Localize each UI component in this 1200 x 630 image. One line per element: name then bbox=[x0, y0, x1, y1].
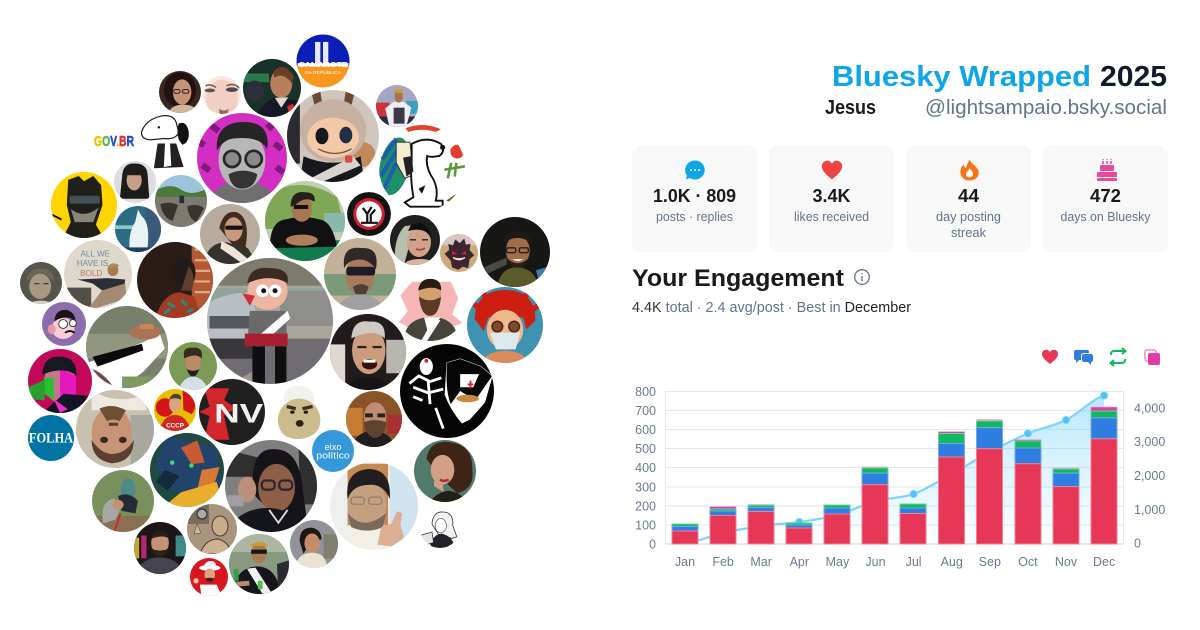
bar: Oct bbox=[1015, 440, 1041, 544]
avatar: NV logo bbox=[199, 379, 265, 445]
avatar: bald bearded man bbox=[346, 391, 402, 447]
left axis labels: 800 bbox=[635, 385, 656, 399]
avatar: woman with black hair bbox=[114, 161, 156, 203]
legend icon: heart bbox=[1042, 350, 1058, 364]
month labels: Jun bbox=[865, 555, 886, 569]
left axis labels: 600 bbox=[635, 423, 656, 437]
avatar: small Snoopy sketch bbox=[141, 116, 189, 168]
cumulative area and line bbox=[685, 392, 1108, 544]
avatar: small man in tee bbox=[376, 85, 418, 127]
avatar: old TV man bbox=[20, 262, 62, 304]
avatar: Camarote logo bbox=[296, 34, 350, 88]
avatar: capybara bbox=[86, 306, 168, 388]
legend icon: quotes bbox=[1145, 350, 1160, 365]
left axis labels bbox=[635, 385, 656, 552]
heading: Your Engagement: Your Engagement bbox=[632, 265, 844, 292]
month labels: Feb bbox=[712, 555, 734, 569]
avatar: man with beer in green setting bbox=[243, 59, 301, 117]
avatar: eixo político logo: político bbox=[316, 451, 350, 461]
avatar: Camarote logo: CAMAROTE bbox=[299, 62, 348, 69]
month labels: Sep bbox=[979, 555, 1001, 569]
avatar: man with floral shirt in profile bbox=[137, 242, 213, 318]
avatar: red ring seal badge bbox=[347, 192, 391, 236]
avatar: eixo político logo: eixo bbox=[325, 442, 341, 452]
avatar: Camarote logo: DA REPÚBLICA bbox=[305, 69, 342, 76]
avatar: smiling man with thumbs-up bbox=[330, 462, 418, 550]
avatar: upside-down man bbox=[76, 390, 154, 468]
title: Bluesky Wrapped bbox=[832, 61, 1091, 93]
stat card: posts bbox=[632, 145, 757, 252]
avatar: magenta background man in glasses bbox=[197, 113, 287, 203]
avatar: man black tee at table bbox=[265, 181, 345, 261]
avatar: woman sunglasses with sash bbox=[200, 204, 260, 264]
left axis labels: 400 bbox=[635, 461, 656, 475]
left axis labels: 500 bbox=[635, 442, 656, 456]
avatar: curly-haired woman bbox=[414, 440, 476, 502]
bar: Nov bbox=[1053, 468, 1079, 544]
avatar: neon magenta and green portrait bbox=[28, 349, 92, 413]
avatar: gov.br wordmark: GOV.BR bbox=[94, 133, 134, 150]
stacked bars bbox=[672, 407, 1117, 544]
avatar: NV logo: NV bbox=[214, 399, 264, 429]
stat card: streak: streak bbox=[951, 226, 987, 240]
month labels: Dec bbox=[1093, 555, 1115, 569]
right axis labels: 2,000 bbox=[1134, 469, 1165, 483]
avatar: blue monster art bbox=[150, 433, 224, 507]
avatar: yellow background soldier bbox=[51, 172, 117, 238]
avatar: man with hat and brick wall: BOLD bbox=[80, 269, 102, 278]
month labels bbox=[675, 555, 1115, 569]
avatar: skeleton and Vasco shield bbox=[400, 344, 494, 438]
right axis labels: 1,000 bbox=[1134, 503, 1165, 517]
avatar: woman with glasses and hand bbox=[225, 440, 317, 532]
stat card: streak: 44 bbox=[958, 186, 979, 206]
stat card: likes bbox=[769, 145, 894, 252]
avatar: man shouting, white hair bbox=[330, 314, 406, 390]
avatar: Folha logo: FOLHA bbox=[29, 431, 73, 447]
avatar: close-up eyes bbox=[203, 76, 241, 118]
legend icon: replies bbox=[1074, 350, 1093, 365]
avatar: central mascot photo bbox=[207, 258, 333, 384]
icon: cake bbox=[1097, 159, 1117, 181]
bar: Sep bbox=[976, 419, 1002, 544]
avatar: pigeon with person bbox=[92, 470, 154, 532]
left axis labels: 200 bbox=[635, 500, 656, 514]
right axis labels: 3,000 bbox=[1134, 435, 1165, 449]
engagement summary: 4.4K total · 2.4 avg/post · Best in December bbox=[632, 300, 911, 316]
avatar: CCCP player bbox=[154, 389, 196, 431]
avatar: cartoon bearded man bbox=[399, 278, 462, 341]
avatar: smiling man with curly hair bbox=[480, 217, 550, 287]
avatar: comic panel bbox=[187, 504, 237, 554]
avatar: dog with towel bbox=[278, 386, 320, 439]
avatar cloud bbox=[20, 34, 550, 596]
avatar: man in dark tee with books bbox=[134, 522, 186, 574]
bar: Aug bbox=[938, 432, 964, 544]
stat card: days on Bluesky: days on Bluesky bbox=[1060, 210, 1151, 224]
engagement chart bbox=[635, 385, 1165, 569]
icon: heart bbox=[822, 161, 842, 180]
right axis labels bbox=[1134, 402, 1165, 550]
stat card: likes: likes received bbox=[794, 210, 869, 224]
avatar: line-art woman drawing bbox=[420, 508, 460, 548]
month labels: Apr bbox=[790, 555, 809, 569]
avatar: Gengar bbox=[440, 234, 478, 272]
bar: Dec bbox=[1091, 407, 1117, 544]
avatar: man in green nature bbox=[169, 342, 217, 390]
legend icon: reposts bbox=[1110, 348, 1126, 366]
bar: May bbox=[824, 505, 850, 544]
month labels: Mar bbox=[750, 555, 772, 569]
month labels: May bbox=[826, 555, 850, 569]
stat card: streak bbox=[906, 145, 1031, 252]
right axis labels: 0 bbox=[1134, 536, 1141, 550]
avatar: rocks landscape bbox=[155, 175, 207, 227]
avatar: eixo político logo bbox=[312, 430, 354, 472]
stat card: days on Bluesky: 472 bbox=[1090, 186, 1121, 206]
chart legend bbox=[1042, 348, 1160, 366]
avatar: woman in scarf bbox=[290, 520, 338, 568]
left axis labels: 0 bbox=[649, 538, 656, 552]
avatar: woman with dark hair bbox=[159, 71, 201, 113]
bar: Apr bbox=[786, 523, 812, 544]
bar: Jan bbox=[672, 524, 698, 544]
avatar: purple cartoon with glasses bbox=[42, 302, 86, 346]
bar: Jun bbox=[862, 466, 888, 544]
month labels: Nov bbox=[1055, 555, 1078, 569]
left axis labels: 100 bbox=[635, 518, 656, 532]
avatar: plush toy bbox=[287, 90, 379, 182]
bar: Feb bbox=[710, 507, 736, 544]
avatar: man in Vasco jersey bbox=[229, 534, 289, 594]
avatar: large Snoopy with nightcap bbox=[379, 125, 465, 208]
avatar: man with sunglasses bbox=[324, 238, 396, 310]
bar: Mar bbox=[748, 504, 774, 544]
avatar: red hat illustration bbox=[190, 558, 228, 596]
month labels: Jul bbox=[906, 555, 922, 569]
month labels: Jan bbox=[675, 555, 695, 569]
avatar: woman with two-tone hair bbox=[390, 215, 440, 269]
icon: chat bubble bbox=[685, 160, 705, 179]
right axis labels: 4,000 bbox=[1134, 402, 1165, 416]
grid lines bbox=[665, 391, 1124, 544]
avatar: man with hat and brick wall: ALL WE bbox=[80, 249, 111, 258]
handle: @lightsampaio.bsky.social bbox=[925, 97, 1167, 119]
icon: info bbox=[855, 270, 869, 284]
title: 2025 bbox=[1100, 61, 1167, 93]
stat card: likes: 3.4K bbox=[812, 186, 850, 206]
stat card: posts: 1.0K · 809 bbox=[653, 186, 736, 206]
left axis labels: 300 bbox=[635, 480, 656, 494]
month labels: Oct bbox=[1018, 555, 1038, 569]
display name: Jesus bbox=[825, 97, 876, 119]
left axis labels: 700 bbox=[635, 404, 656, 418]
stat card: streak: day posting bbox=[936, 210, 1001, 224]
avatar: Folha logo bbox=[28, 415, 74, 461]
month labels: Aug bbox=[941, 555, 963, 569]
avatar: man with hat and brick wall bbox=[64, 240, 132, 308]
icon: flame bbox=[960, 160, 979, 180]
bar: Jul bbox=[900, 504, 926, 544]
stat card: days on Bluesky bbox=[1043, 145, 1168, 252]
avatar: red-haired masked anime bbox=[467, 287, 543, 363]
stat card: posts: posts · replies bbox=[656, 210, 733, 224]
avatar: CCCP player: CCCP bbox=[166, 423, 184, 430]
avatar: man with hat and brick wall: HAVE IS bbox=[77, 259, 109, 268]
avatar: Moomin bbox=[115, 206, 161, 252]
